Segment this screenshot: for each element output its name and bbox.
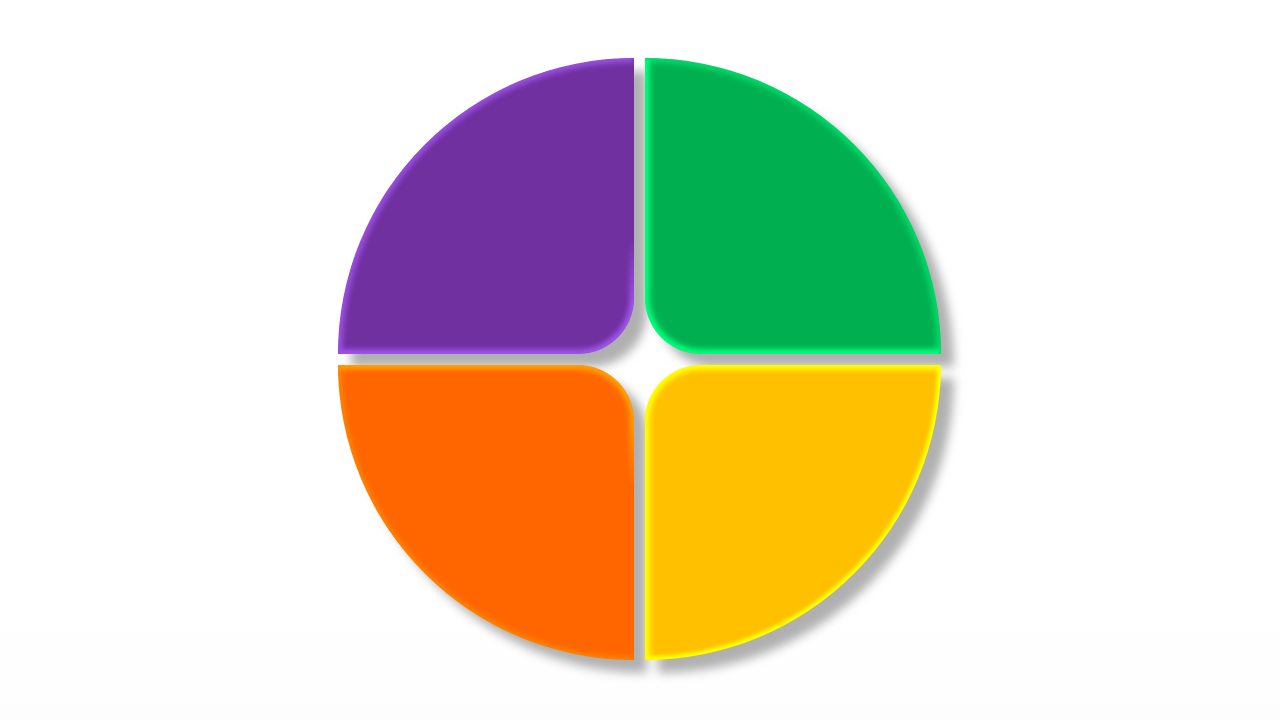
- four-part circle diagram: [338, 58, 960, 680]
- segment: purple, top left: [338, 58, 634, 354]
- segment: green, top right: [645, 58, 941, 354]
- segment: orange, bottom left: [338, 365, 634, 660]
- drop shadow: [351, 71, 954, 673]
- segment: yellow, bottom right: [645, 365, 941, 660]
